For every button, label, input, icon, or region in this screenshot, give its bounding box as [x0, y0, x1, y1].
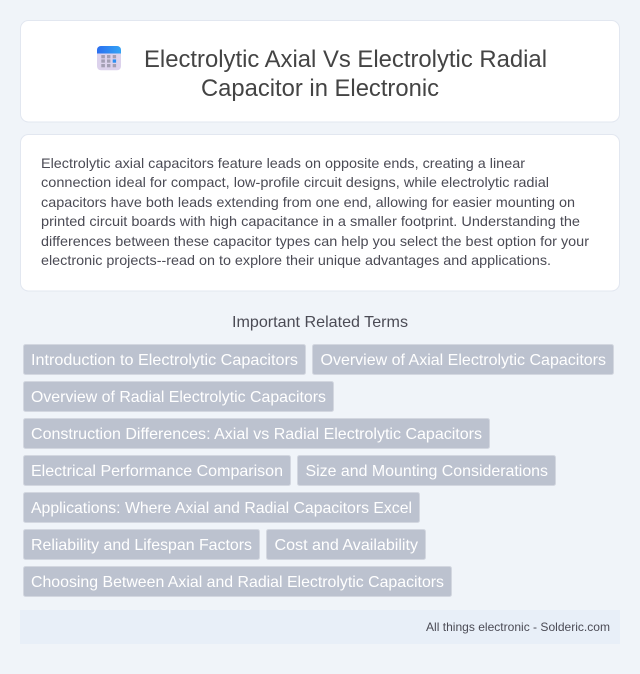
intro paragraph [41, 155, 589, 268]
chip: Choosing Between Axial and Radial Electrolytic Capacitors [31, 574, 444, 591]
chip [24, 566, 452, 596]
chip [24, 344, 306, 374]
chip [24, 418, 490, 448]
chip: Size and Mounting Considerations [306, 463, 548, 480]
intro paragraph: electronic projects--read on to explore their unique advantages and applications. [41, 252, 551, 268]
panel: title card [20, 20, 620, 122]
chip: Reliability and Lifespan Factors [31, 537, 252, 554]
heading: important related terms: Important Related Terms [232, 314, 408, 331]
chip: Cost and Availability [274, 537, 418, 554]
chip: Applications: Where Axial and Radial Capacitors Excel [31, 500, 412, 517]
intro paragraph: Electrolytic axial capacitors feature leads on opposite ends, creating a linear [41, 155, 525, 171]
panel: intro text card [20, 134, 620, 291]
footer bar [20, 610, 620, 644]
footer credit: All things electronic - Solderic.com [426, 620, 610, 634]
chip [24, 456, 290, 486]
intro paragraph: differences between these capacitor types can help you select the best option for your [41, 233, 589, 249]
intro paragraph: printed circuit boards with high capacitance in a smaller footprint. Understanding the [41, 213, 580, 229]
chip [298, 456, 556, 486]
intro paragraph: capacitors have both leads extending from one end, allowing for easier mounting on [41, 194, 575, 210]
chip: Overview of Axial Electrolytic Capacitors [320, 352, 606, 369]
chip [24, 382, 334, 412]
chip [24, 530, 260, 560]
title: Capacitor in Electronic [201, 75, 439, 102]
chip [266, 530, 426, 560]
chip: Overview of Radial Electrolytic Capacitors [31, 389, 326, 406]
chip: Introduction to Electrolytic Capacitors [31, 352, 298, 369]
title: Electrolytic Axial Vs Electrolytic Radial [144, 46, 547, 73]
chip: Electrical Performance Comparison [31, 463, 283, 480]
title [144, 46, 547, 102]
related terms chips [24, 344, 614, 596]
chip: Construction Differences: Axial vs Radial Electrolytic Capacitors [31, 426, 482, 443]
icon: calendar grid [97, 46, 121, 70]
chip [312, 344, 614, 374]
intro paragraph: connection ideal for compact, low-profile circuit designs, while electrolytic radial [41, 174, 549, 190]
chip [24, 492, 420, 522]
